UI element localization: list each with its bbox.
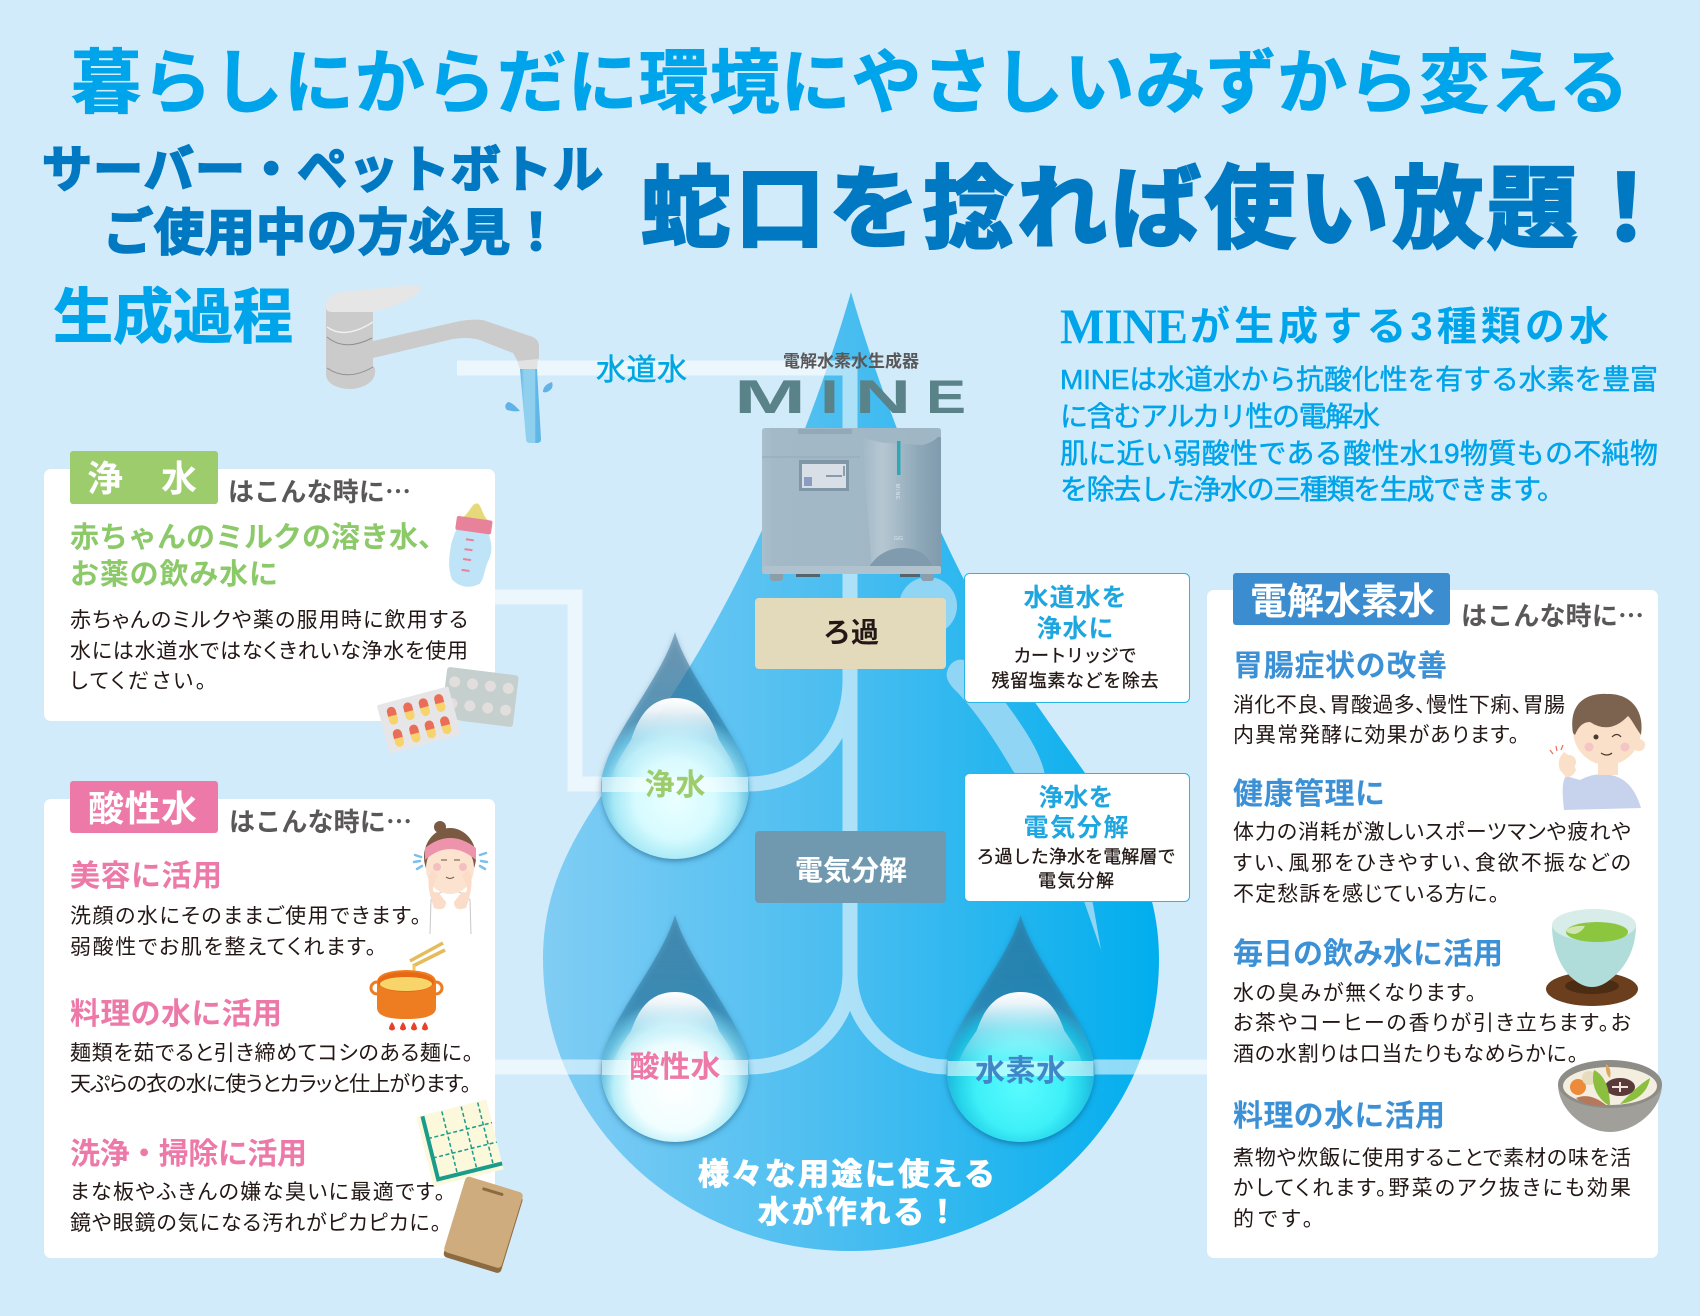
callout: tap water to purified water: 浄水に [1036,615,1114,643]
when to use: はこんな時に… [228,472,411,509]
product caption: 電解水素水生成器 [783,351,919,371]
when to use: はこんな時に… [1461,596,1644,633]
callout: electrolysing purified water: 浄水を [1038,784,1114,812]
panel body: 水には水道水ではなくきれいな浄水を使用 [70,640,468,663]
caption inside big drop: 様々な用途に使える [698,1157,995,1192]
section: cleaning [70,1138,445,1235]
step: filtration [755,598,946,669]
section: stomach: 消化不良、胃酸過多、慢性下痢、胃腸 [1233,694,1565,717]
tag: purified water: 浄 水 [87,458,197,499]
icon: green tea cup [1546,909,1638,1006]
heading: three kinds of water: MINE [1060,298,1188,354]
section: beauty: 美容に活用 [70,860,222,893]
section: health [1233,778,1631,906]
intro text: に含むアルカリ性の電解水 [1060,401,1380,432]
tag: hydrogen water [1233,573,1450,625]
section: stomach: 内異常発酵に効果があります。 [1233,724,1519,747]
subtitle: server and bottle users [42,142,603,261]
section: stomach: 胃腸症状の改善 [1233,650,1447,683]
drop: acidic water [601,915,749,1142]
step: electrolysis [755,831,946,903]
title: 暮らしにからだに環境にやさしいみずから変える [71,44,1629,122]
section: health: すい、風邪をひきやすい、食欲不振などの [1233,852,1631,875]
section: drinking water: 水の臭みが無くなります。 [1233,982,1476,1005]
section: drinking water: 酒の水割りは口当たりもなめらかに。 [1233,1043,1578,1066]
subtitle: server and bottle users: ご使用中の方必見！ [103,205,561,261]
section: cooking: 煮物や炊飯に使用することで素材の味を活 [1233,1147,1631,1170]
section: stomach [1233,650,1565,747]
drop: purified water [601,632,749,859]
callout: electrolysing purified water: ろ過した浄水を電解層で [976,847,1176,867]
when to use: はこんな時に… [229,802,412,839]
subtitle: server and bottle users: サーバー・ペットボトル [42,142,603,198]
headline: 蛇口を捻れば使い放題！ [641,160,1671,260]
section: cleaning: 鏡や眼鏡の気になる汚れがピカピカに。 [70,1212,441,1235]
product logo: I [820,370,839,423]
drop: purified water: 浄水 [644,769,706,802]
tag: purified water [70,451,218,504]
intro text: MINEは水道水から抗酸化性を有する水素を豊富 [1060,364,1658,395]
section: cooking: 料理の水に活用 [70,998,282,1031]
flow lines [457,368,1210,1067]
step: electrolysis: 電気分解 [795,855,907,886]
product logo [734,370,966,423]
icon: gray tablet sheet [441,667,519,727]
heading: three kinds of water: が生成する3種類の水 [1190,305,1609,349]
section: beauty: 弱酸性でお肌を整えてくれます。 [70,936,376,959]
icon: cutting board [442,1176,525,1274]
callout: electrolysing purified water: 電気分解 [1038,871,1114,891]
device: MINE generator: G/G [894,536,903,542]
product logo: E [926,370,966,423]
device: MINE generator [762,428,941,581]
section: beauty [70,860,421,959]
panel body [70,609,468,693]
heading: generation process: 生成過程 [53,284,293,351]
section: cooking: 的です。 [1233,1208,1313,1231]
section: cleaning: 洗浄・掃除に活用 [70,1138,307,1171]
callout: tap water to purified water: 残留塩素などを除去 [992,671,1158,691]
faucet with water [326,285,553,443]
section: health: 体力の消耗が激しいスポーツマンや疲れや [1233,821,1631,844]
section: cooking: 麺類を茹でると引き締めてコシのある麺に。 [70,1042,473,1065]
panel body: してください。 [70,670,206,693]
panel: acidic water [44,781,495,1258]
heading: three kinds of water [1060,298,1609,354]
panel heading: 赤ちゃんのミルクの溶き水、 [70,521,447,554]
intro text: を除去した浄水の三種類を生成できます。 [1060,474,1565,505]
section: cooking: かしてくれます。野菜のアク抜きにも効果 [1233,1177,1631,1200]
section: cooking [70,998,473,1096]
icon: cooking pot [371,943,445,1030]
tag: acidic water: 酸性水 [88,788,197,829]
icon: capsule sheet [377,686,461,754]
icon: baby bottle [445,501,498,589]
section: health: 健康管理に [1233,778,1385,811]
tap water label: 水道水 [596,354,687,387]
section: beauty: 洗顔の水にそのままご使用できます。 [70,905,421,928]
icon: boy making OK sign [1550,694,1645,810]
tag: acidic water [70,781,218,833]
panel: electrolysed hydrogen water [1207,573,1658,1258]
tag: hydrogen water: 電解水素水 [1250,581,1435,622]
panel body: 赤ちゃんのミルクや薬の服用時に飲用する [70,609,468,632]
icon: checked cloth [416,1099,504,1187]
icon: simmered vegetable bowl [1558,1060,1662,1132]
callout: electrolysing purified water: 電気分解 [1024,814,1128,842]
panel: purified water [44,451,495,721]
step: filtration: ろ過 [823,617,879,648]
section: drinking water: お茶やコーヒーの香りが引き立ちます。お [1233,1012,1631,1035]
product logo: N [855,370,911,423]
icon: woman washing face [414,821,487,934]
device: MINE generator: MINE [894,484,900,500]
drop: hydrogen water [946,915,1094,1142]
drop: acidic water: 酸性水 [630,1051,720,1084]
section: drinking water: 毎日の飲み水に活用 [1233,938,1503,971]
callout: tap water to purified water: カートリッジで [1014,646,1136,666]
callout: tap water to purified water [964,574,1190,702]
callout: tap water to purified water: 水道水を [1024,584,1126,612]
section: drinking water [1233,938,1631,1066]
large water drop [543,292,1159,1251]
section: cooking: 天ぷらの衣の水に使うとカラッと仕上がります。 [70,1073,471,1096]
callout: electrolysing purified water [964,774,1190,902]
section: cooking: 料理の水に活用 [1233,1100,1445,1133]
drop: hydrogen water: 水素水 [975,1055,1066,1088]
intro text [1060,364,1658,505]
product logo: M [734,370,806,423]
caption inside big drop: 水が作れる！ [758,1195,958,1230]
section: cooking [1233,1100,1631,1231]
panel heading [70,521,447,591]
section: health: 不定愁訴を感じている方に。 [1233,883,1499,906]
caption inside big drop [698,1157,995,1230]
intro text: 肌に近い弱酸性である酸性水19物質もの不純物 [1060,438,1658,469]
panel heading: お薬の飲み水に [70,558,278,591]
section: cleaning: まな板やふきんの嫌な臭いに最適です。 [70,1181,445,1204]
